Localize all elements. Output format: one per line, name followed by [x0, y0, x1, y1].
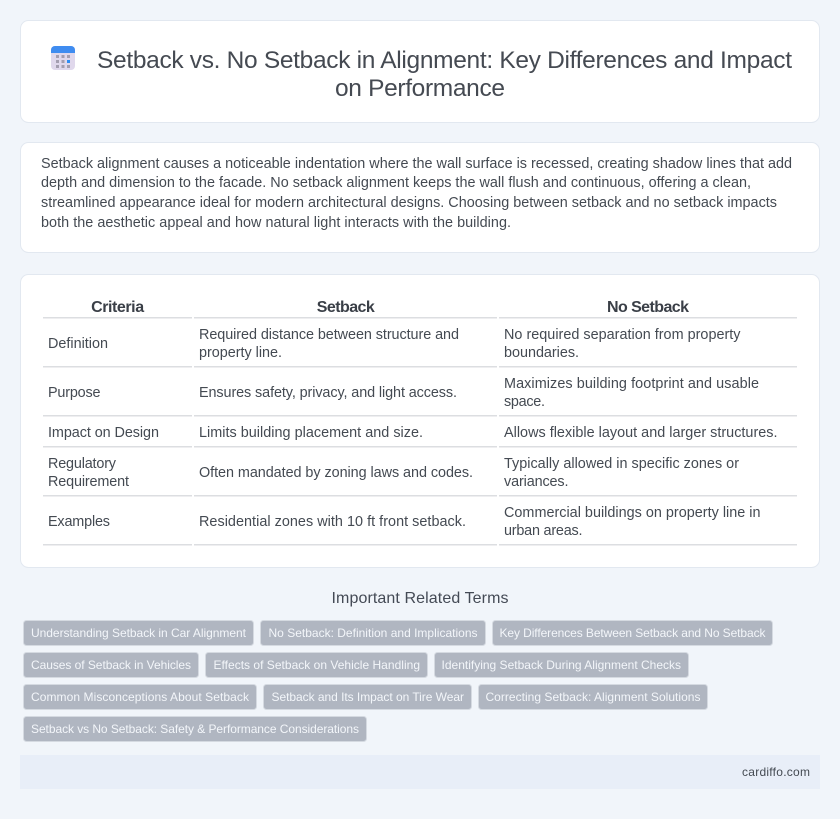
tag: Identifying Setback During Alignment Checks	[442, 658, 681, 672]
panel: summary paragraph	[20, 142, 820, 252]
table row: regulatory requirement: Requirement	[48, 474, 129, 490]
tag	[24, 652, 198, 678]
table row: examples: Residential zones with 10 ft front setback.	[199, 514, 466, 530]
table row: regulatory requirement: Regulatory	[48, 456, 117, 472]
table header row: Setback	[317, 299, 375, 316]
tag: Key Differences Between Setback and No Setback	[500, 626, 766, 640]
tag	[260, 620, 486, 646]
table row: regulatory requirement: Typically allowed in specific zones or	[504, 456, 739, 472]
text block: summary: Setback alignment causes a noticeable indentation where the wall surface is recessed, creating shadow lines that add	[41, 156, 792, 172]
tag	[206, 652, 428, 678]
table row: definition: Required distance between structure and	[199, 327, 459, 343]
tag	[492, 620, 772, 646]
tag: Understanding Setback in Car Alignment	[31, 626, 247, 640]
table row: examples	[48, 505, 760, 539]
table row: impact on design	[48, 425, 778, 441]
table row: purpose: Maximizes building footprint and usable	[504, 376, 759, 392]
tag	[478, 684, 708, 710]
title: on Performance	[335, 75, 505, 102]
text block: summary: depth and dimension to the facade. No setback alignment keeps the wall flush and continuous, offering a clean,	[41, 175, 751, 191]
table header row: No Setback	[607, 299, 689, 316]
table row: examples: Commercial buildings on property line in	[504, 505, 760, 521]
table row: definition: property line.	[199, 345, 282, 361]
table row: purpose	[48, 376, 759, 410]
tag	[434, 652, 688, 678]
table row: impact on design: Allows flexible layout and larger structures.	[504, 425, 778, 441]
table row: impact on design: Limits building placement and size.	[199, 425, 423, 441]
heading: important related terms: Important Related Terms	[332, 590, 508, 607]
table row: definition: Definition	[48, 336, 108, 352]
table row: definition: boundaries.	[504, 345, 579, 361]
table row: impact on design: Impact on Design	[48, 425, 159, 441]
panel: title header	[20, 20, 820, 122]
tag	[24, 716, 366, 742]
tag	[264, 684, 472, 710]
panel: comparison table	[20, 274, 820, 568]
table row: purpose: Purpose	[48, 385, 100, 401]
related term tags	[24, 620, 772, 742]
tag: Effects of Setback on Vehicle Handling	[214, 658, 420, 672]
text block: summary: streamlined appearance ideal for modern architectural designs. Choosing between setback and no setback impacts	[41, 195, 777, 211]
tag: Correcting Setback: Alignment Solutions	[486, 690, 700, 704]
table row: regulatory requirement: variances.	[504, 474, 568, 490]
table header row	[91, 299, 689, 316]
text block: summary: both the aesthetic appeal and how natural light interacts with the building.	[41, 215, 511, 231]
tag: Setback and Its Impact on Tire Wear	[272, 690, 464, 704]
table row: examples: urban areas.	[504, 523, 582, 539]
text block: summary	[41, 156, 792, 231]
table row: regulatory requirement	[48, 456, 739, 490]
table row: definition	[48, 327, 741, 361]
table row: definition: No required separation from property	[504, 327, 741, 343]
table row: regulatory requirement: Often mandated by zoning laws and codes.	[199, 465, 473, 481]
table header row: Criteria	[91, 299, 144, 316]
tag: Setback vs No Setback: Safety & Performance Considerations	[31, 722, 359, 736]
footer source text: cardiffo.com	[742, 765, 810, 779]
tag: Common Misconceptions About Setback	[31, 690, 250, 704]
title	[97, 47, 792, 102]
tag	[24, 620, 254, 646]
title: Setback vs. No Setback in Alignment: Key Differences and Impact	[97, 47, 792, 74]
tag: No Setback: Definition and Implications	[268, 626, 478, 640]
table row: examples: Examples	[48, 514, 110, 530]
tag	[24, 684, 256, 710]
footer bar	[20, 755, 820, 789]
table row: purpose: Ensures safety, privacy, and light access.	[199, 385, 457, 401]
tag: Causes of Setback in Vehicles	[31, 658, 191, 672]
table row: purpose: space.	[504, 394, 545, 410]
icon: calendar	[51, 46, 75, 70]
